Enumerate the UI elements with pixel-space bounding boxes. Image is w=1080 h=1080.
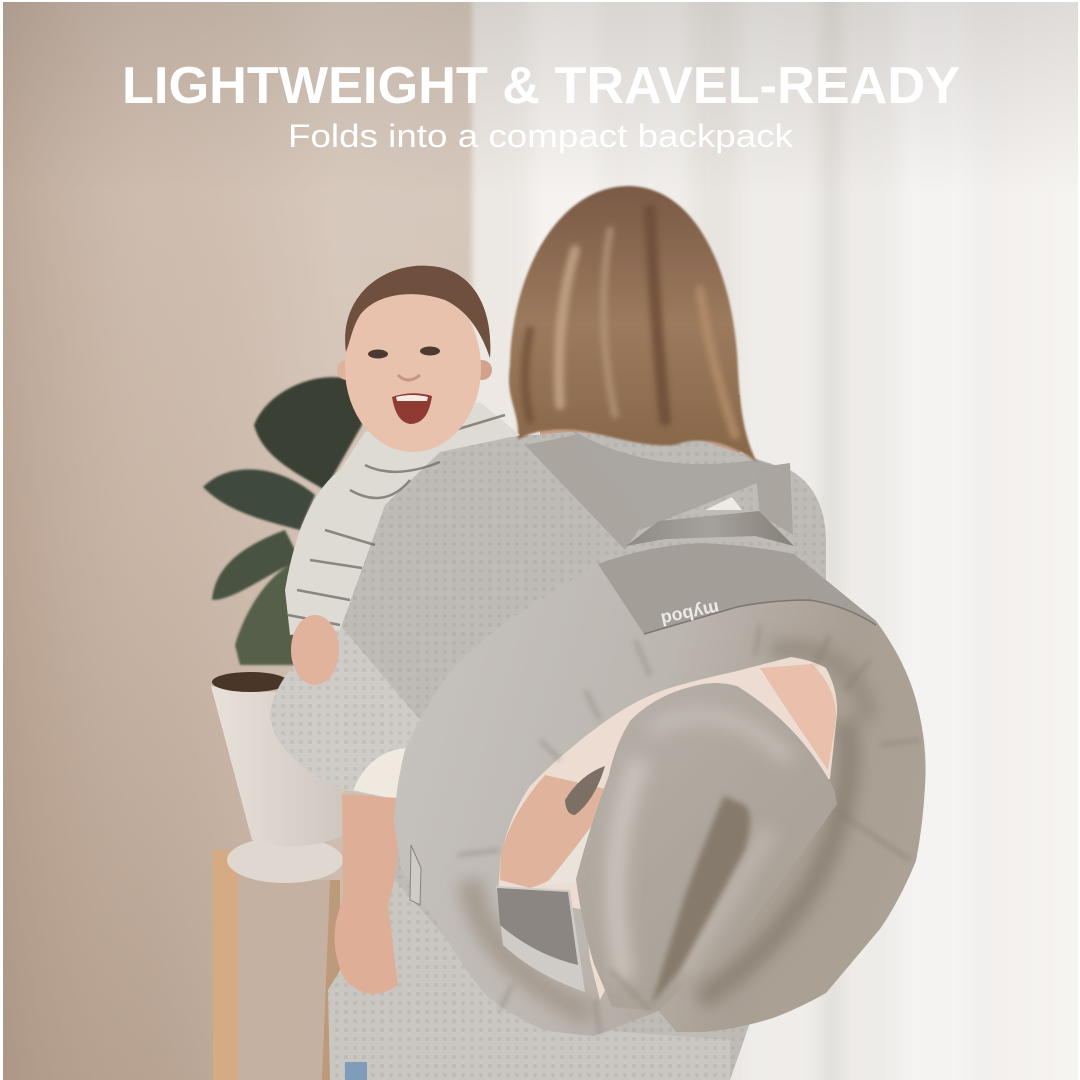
cushion: printed label	[496, 886, 585, 992]
woman: sweater	[270, 430, 835, 1080]
woman: neck	[540, 395, 740, 455]
cushion: top panel with logo	[598, 543, 876, 634]
cushion: pleats	[458, 625, 920, 1035]
jeans peek	[345, 1062, 367, 1080]
plant pot on stool	[211, 672, 345, 1080]
cushion: ring shading	[470, 649, 870, 1015]
plant	[203, 377, 365, 665]
cushion: outer ring	[394, 569, 926, 1036]
woman: hair	[509, 186, 757, 462]
logo on cushion: mybod	[659, 598, 721, 630]
subtitle: Folds into a compact backpack	[288, 118, 794, 154]
baby: striped top	[285, 402, 520, 635]
baby: hand	[291, 615, 339, 685]
tag above bow	[705, 497, 742, 510]
cushion: side tag	[410, 845, 421, 905]
baby: legs and foot	[334, 748, 408, 994]
baby: head and face	[337, 266, 492, 452]
cushion: middle fold	[576, 683, 837, 1010]
carrying strap bow	[626, 511, 794, 546]
cushion: inner opening with fabric	[498, 657, 837, 1000]
folded grey cushion backpack	[380, 511, 940, 1050]
title: LIGHTWEIGHT & TRAVEL-READY	[122, 57, 960, 115]
